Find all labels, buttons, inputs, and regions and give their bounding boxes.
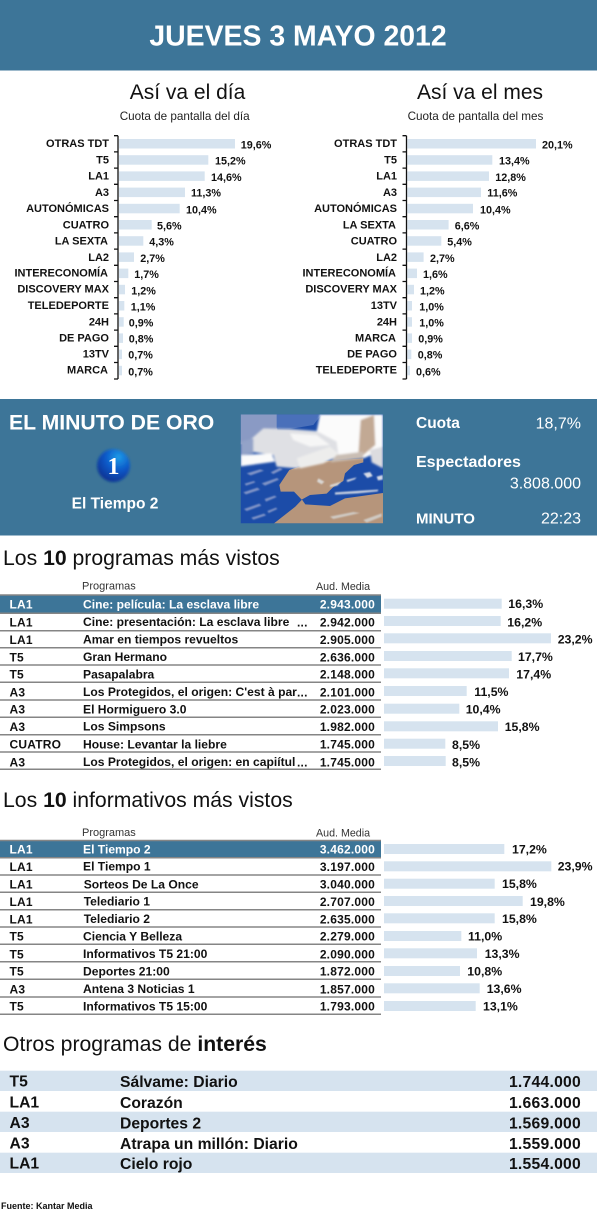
table: programas: 1.982.000 [320, 720, 375, 734]
table: programas: 2.943.000 [320, 598, 375, 612]
bar chart: programas: 17,4% [516, 668, 551, 682]
source note: Fuente: Kantar Media [1, 1201, 94, 1211]
table: otros programas: A3 [10, 1115, 30, 1132]
table: programas: Programas [82, 580, 136, 592]
bar chart: día: 1,1% [131, 301, 156, 313]
bar chart: informativos: 13,6% [487, 982, 522, 996]
bar chart: mes: LA1 [376, 171, 397, 183]
bar chart: mes: 0,6% [416, 367, 441, 379]
heading: mes: Así va el mes [417, 81, 543, 104]
panel: así va el mes [302, 81, 573, 379]
table: otros programas: T5 [10, 1074, 28, 1091]
icon: la 1 logo: 1 [108, 454, 120, 480]
bar chart: mes: 13TV [371, 300, 398, 312]
bar chart: día: AUTONÓMICAS [26, 202, 109, 215]
bar chart: día: 5,6% [157, 220, 182, 232]
table: programas: 2.101.000 [320, 685, 375, 699]
heading: los 10 informativos: Los 10 informativos más vistos [3, 789, 293, 812]
bar chart: informativos [384, 842, 593, 1014]
table: programas: LA1 [10, 633, 33, 647]
icon: la 1 logo [97, 449, 130, 482]
bar chart: mes: 1,0% [419, 317, 444, 329]
bar chart: día: DISCOVERY MAX [17, 284, 110, 296]
table: programas: ... [297, 685, 308, 699]
table: otros programas [0, 1071, 597, 1173]
table: programas: A3 [10, 685, 25, 699]
bar chart: mes: INTERECONOMÍA [302, 267, 396, 280]
table: programas: Los Protegidos, el origen: C'est à par [83, 685, 297, 699]
table: informativos: T5 [10, 947, 24, 961]
table: informativos: 1.857.000 [320, 982, 375, 996]
table: programas: 2.636.000 [320, 650, 375, 664]
table: otros programas: LA1 [10, 1156, 39, 1173]
table: programas: LA1 [10, 598, 33, 612]
table: informativos: Aud. Media [316, 828, 370, 840]
bar chart: informativos: 10,8% [467, 964, 502, 978]
bar chart: informativos: 15,8% [502, 912, 537, 926]
stat: cuota: Cuota [416, 415, 460, 432]
table: informativos: 1.872.000 [320, 965, 375, 979]
bar chart: día: 24H [89, 317, 109, 329]
table: informativos: Informativos T5 15:00 [83, 999, 208, 1013]
subheading: mes: Cuota de pantalla del mes [408, 110, 544, 123]
table: otros programas: Corazón [120, 1095, 183, 1112]
bar chart: día: 14,6% [211, 172, 242, 184]
bar chart: programas: 15,8% [505, 720, 540, 734]
table: programas: A3 [10, 703, 25, 717]
table: informativos: LA1 [10, 895, 33, 909]
table: otros programas: 1.559.000 [509, 1136, 581, 1153]
table: informativos: 3.197.000 [320, 860, 375, 874]
bar chart: día: 11,3% [191, 188, 221, 200]
bar chart: día: 1,2% [131, 285, 156, 297]
bar chart: mes: 13,4% [499, 156, 530, 168]
bar chart: mes: A3 [383, 187, 397, 199]
stat: minuto: MINUTO [416, 510, 475, 528]
table: programas: Pasapalabra [83, 668, 155, 682]
table: informativos: Sorteos De La Once [84, 877, 199, 891]
table: informativos: El Tiempo 2 [83, 842, 151, 856]
bar chart: día: 0,9% [129, 317, 154, 329]
table: informativos: 2.090.000 [320, 947, 375, 961]
bar chart: día: 1,7% [134, 269, 159, 281]
bar chart: programas [384, 597, 593, 770]
table: informativos: Informativos T5 21:00 [83, 947, 208, 961]
table: programas: Cine: presentación: La esclava libre [83, 615, 290, 629]
table: programas: LA1 [10, 615, 33, 629]
bar chart: día: T5 [96, 154, 109, 166]
table: otros programas: Cielo rojo [120, 1156, 192, 1173]
table: informativos: 2.635.000 [320, 912, 375, 926]
table: programas [0, 580, 381, 769]
bar chart: día [14, 136, 272, 379]
bar chart: día: TELEDEPORTE [28, 300, 109, 312]
table: informativos: El Tiempo 1 [83, 860, 151, 874]
table: informativos: LA1 [10, 912, 33, 926]
bar chart: mes: 1,6% [423, 269, 448, 281]
table: otros programas: 1.744.000 [509, 1074, 581, 1091]
bar chart: programas: 17,7% [518, 650, 553, 664]
table: informativos: LA1 [10, 843, 33, 857]
bar chart: mes: 10,4% [480, 204, 511, 216]
heading: el minuto de oro: EL MINUTO DE ORO [9, 412, 214, 434]
title banner [0, 0, 597, 70]
bar chart: mes: 20,1% [542, 139, 573, 151]
bar chart: informativos: 13,3% [485, 947, 520, 961]
table: informativos: T5 [10, 965, 24, 979]
table: informativos: 2.707.000 [320, 895, 375, 909]
table: programas: Amar en tiempos revueltos [83, 632, 239, 646]
bar chart: día: 0,7% [128, 350, 153, 362]
bar chart: día: 0,8% [129, 334, 154, 346]
bar chart: mes: 1,0% [419, 301, 444, 313]
bar chart: mes: 6,6% [455, 220, 480, 232]
stat: cuota [416, 415, 581, 432]
table: programas: Aud. Media [316, 581, 370, 593]
bar chart: mes: 2,7% [430, 253, 455, 265]
bar chart: día: LA SEXTA [55, 235, 108, 247]
heading: otros programas: Otros programas de interés [3, 1033, 267, 1056]
table: programas: A3 [10, 755, 25, 769]
table: programas: Gran Hermano [83, 650, 167, 664]
table: programas: 1.745.000 [320, 738, 375, 752]
table: otros programas: A3 [10, 1136, 30, 1153]
bar chart: día: 15,2% [215, 156, 246, 168]
bar chart: mes: T5 [384, 154, 397, 166]
table: programas: 2.905.000 [320, 633, 375, 647]
panel: el minuto de oro [0, 399, 597, 536]
bar chart: programas: 16,3% [508, 597, 543, 611]
table: informativos: Antena 3 Noticias 1 [83, 982, 195, 996]
table: programas: 2.148.000 [320, 668, 375, 682]
table: programas: A3 [10, 720, 25, 734]
bar chart: informativos: 19,8% [530, 895, 565, 909]
satellite image [241, 414, 383, 523]
bar chart: mes: DE PAGO [347, 349, 397, 361]
bar chart: día: 10,4% [186, 204, 217, 216]
bar chart: día: 13TV [83, 349, 110, 361]
table: informativos: Deportes 21:00 [83, 964, 170, 978]
table: programas: CUATRO [10, 738, 61, 752]
bar chart: mes: 5,4% [447, 237, 472, 249]
table: informativos: Telediario 1 [84, 895, 150, 909]
bar chart: mes: LA SEXTA [343, 219, 396, 231]
bar chart: día: INTERECONOMÍA [14, 267, 108, 280]
stat: cuota: 18,7% [536, 416, 581, 432]
bar chart: mes: TELEDEPORTE [316, 365, 397, 377]
bar chart: programas: 10,4% [466, 702, 501, 716]
stat: espectadores: 3.808.000 [510, 476, 581, 492]
bar chart: día: DE PAGO [59, 333, 109, 345]
table: informativos: LA1 [10, 878, 33, 892]
bar chart: programas: 8,5% [452, 756, 480, 770]
stat: minuto [416, 510, 581, 528]
bar chart: día: OTRAS TDT [46, 138, 109, 150]
table: programas: T5 [10, 650, 24, 664]
bar chart: día: 0,7% [128, 367, 153, 379]
table: informativos: 3.462.000 [320, 843, 375, 857]
table: informativos: Ciencia Y Belleza [83, 929, 182, 943]
bar chart: día: CUATRO [63, 219, 109, 231]
table: otros programas: LA1 [10, 1094, 39, 1111]
table: programas: El Hormiguero 3.0 [83, 702, 187, 716]
stat: espectadores [416, 454, 581, 492]
bar chart: día: MARCA [67, 365, 108, 377]
bar chart: mes: 0,8% [418, 350, 443, 362]
table: programas: ... [297, 755, 308, 769]
bar chart: mes: OTRAS TDT [334, 138, 397, 150]
bar chart: programas: 16,2% [507, 615, 542, 629]
panel: así va el día [14, 81, 272, 379]
table: otros programas: 1.569.000 [509, 1116, 581, 1132]
bar chart: mes: 1,2% [420, 285, 445, 297]
table: programas: Los Protegidos, el origen: en capiítul [83, 755, 295, 769]
heading: los 10 programas: Los 10 programas más vistos [3, 547, 280, 570]
bar chart: informativos: 23,9% [558, 860, 593, 874]
bar chart: informativos: 17,2% [512, 842, 547, 856]
table: programas: 1.745.000 [320, 755, 375, 769]
bar chart: informativos: 15,8% [502, 877, 537, 891]
table: programas: 2.942.000 [320, 615, 375, 629]
bar chart: mes: 12,8% [495, 172, 526, 184]
table: otros programas: 1.663.000 [509, 1095, 581, 1112]
table: programas: House: Levantar la liebre [83, 737, 227, 751]
table: informativos: LA1 [10, 860, 33, 874]
bar chart: informativos: 11,0% [468, 930, 502, 944]
bar chart: mes: MARCA [355, 333, 396, 345]
subheading: día: Cuota de pantalla del día [120, 110, 250, 123]
heading: día: Así va el día [130, 81, 246, 104]
table: informativos [0, 827, 381, 1014]
table: otros programas: Sálvame: Diario [120, 1074, 238, 1091]
bar chart: programas: 11,5% [474, 685, 509, 699]
bar chart: mes: 0,9% [418, 334, 443, 346]
bar chart: día: 19,6% [241, 139, 272, 151]
bar chart: día: A3 [95, 187, 109, 199]
bar chart: programas: 23,2% [558, 632, 593, 646]
table: programas: T5 [10, 668, 24, 682]
stat: espectadores: Espectadores [416, 454, 521, 471]
table: informativos: 1.793.000 [320, 1000, 375, 1014]
table: otros programas: Deportes 2 [120, 1116, 201, 1132]
table: informativos: T5 [10, 1000, 24, 1014]
bar chart: mes [302, 136, 573, 379]
title banner: JUEVES 3 MAYO 2012 [149, 20, 447, 52]
table: informativos: Telediario 2 [84, 912, 150, 926]
bar chart: informativos: 13,1% [483, 1000, 518, 1014]
bar chart: programas: 8,5% [452, 738, 480, 752]
bar chart: mes: 24H [377, 317, 397, 329]
bar chart: día: 4,3% [149, 237, 174, 249]
bar chart: mes: 11,6% [487, 188, 518, 200]
stat: minuto: 22:23 [541, 510, 581, 528]
program name: El Tiempo 2 [72, 496, 158, 512]
table: otros programas: 1.554.000 [509, 1156, 581, 1173]
bar chart: día: 2,7% [140, 253, 165, 265]
bar chart: día: LA2 [88, 252, 109, 264]
bar chart: mes: CUATRO [351, 235, 397, 247]
table: programas: ... [297, 615, 308, 629]
table: programas: Cine: película: La esclava libre [83, 598, 259, 612]
bar chart: mes: LA2 [376, 252, 397, 264]
table: otros programas: Atrapa un millón: Diario [120, 1136, 298, 1153]
table: programas: 2.023.000 [320, 703, 375, 717]
table: programas: Los Simpsons [83, 720, 166, 734]
table: informativos: 3.040.000 [320, 878, 375, 892]
table: informativos: T5 [10, 930, 24, 944]
bar chart: mes: AUTONÓMICAS [314, 202, 397, 215]
table: informativos: Programas [82, 827, 136, 839]
bar chart: mes: DISCOVERY MAX [305, 284, 398, 296]
table: informativos: 2.279.000 [320, 930, 375, 944]
table: informativos: A3 [10, 982, 25, 996]
bar chart: día: LA1 [88, 171, 109, 183]
